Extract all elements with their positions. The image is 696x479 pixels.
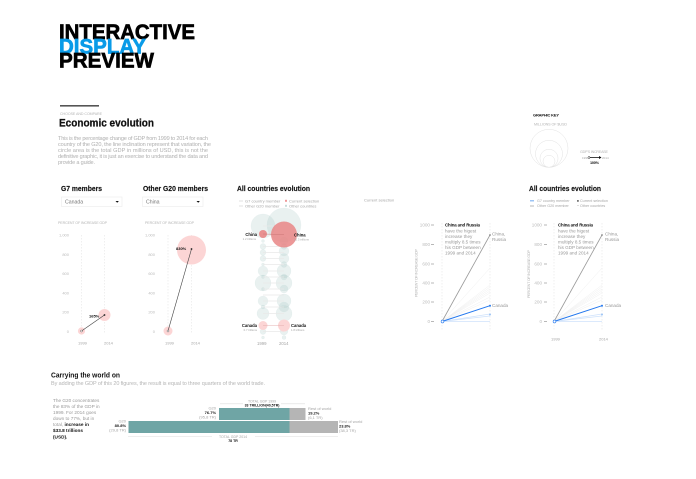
panel: Other G20 members: 2014: [191, 340, 201, 346]
annotation: China,: [605, 232, 618, 236]
panel: G7 members: 200: [62, 310, 70, 314]
panel: line chart 2: 1999: [551, 336, 561, 342]
annotation: increase they: [558, 234, 586, 239]
panel: line chart 2: [527, 184, 622, 342]
panel: all countries bubbles: All countries evolution: [237, 184, 310, 193]
stacked bar: 2014: (38,3 TR): [339, 428, 356, 433]
intro paragraph: [58, 136, 211, 166]
selection: Canada: Canada: [291, 323, 307, 328]
annotation: [444, 221, 509, 308]
graphic key: [530, 112, 609, 167]
stacked bar: 1999: Rest of world: [308, 406, 331, 411]
legend: Other countries: [580, 204, 605, 208]
side note: $33.8 trillions: [53, 428, 83, 433]
panel: line chart 2: 1000: [532, 223, 542, 228]
legend: Other countries: [289, 203, 316, 208]
annotation: 1999 and 2014: [445, 250, 476, 256]
annotation: his GDP between: [445, 245, 481, 250]
stacked bar: 2014: 80.8%: [115, 423, 126, 428]
side note: (USD).: [53, 434, 67, 440]
intro block: [58, 105, 211, 166]
stacked bar: 2014: [109, 418, 362, 443]
panel: all countries bubbles: Current selection: [364, 197, 394, 202]
panel: G7 members: 1,000: [59, 232, 70, 238]
panel: line chart 2: 800: [534, 242, 542, 247]
slope lines: [553, 234, 603, 323]
panel: line chart 1: PERCENT OF INCREASE GDP: [414, 249, 418, 297]
stacked bar: 2014: Rest of world: [339, 419, 362, 424]
selection: Canada: 1.8 trillions: [291, 328, 305, 332]
stacked bar: 2014: G20: [118, 418, 127, 424]
chart: China slope: [164, 236, 206, 336]
panel: G7 members: 800: [62, 252, 70, 257]
annotation: 1999 and 2014: [558, 250, 589, 256]
panel: all countries bubbles: [237, 184, 394, 346]
selection: China: China: [294, 232, 306, 238]
selector: Canada: [62, 197, 122, 206]
annotation: Russia: [605, 237, 619, 242]
annotation: have the higest: [558, 228, 590, 234]
side note: [53, 398, 100, 440]
panel: all countries bubbles: 2014: [279, 341, 289, 346]
selection: China: [243, 222, 310, 248]
selection: Canada: Canada: [242, 323, 258, 328]
stacked bar: 1999: 76.7%: [205, 410, 216, 415]
panel: Other G20 members: 0: [153, 329, 156, 334]
panel: line chart 2: 200: [534, 300, 542, 305]
selection: China: 1.2 trillions: [243, 237, 257, 241]
stacked bar: 1999: TOTAL GDP 1999: [248, 400, 276, 404]
stacked bar: 1999: (95,8 TR): [199, 414, 217, 420]
legend: Other G20 member: [537, 204, 570, 208]
annotation: multiply 8.5 times: [445, 240, 481, 244]
annotation: China,: [492, 232, 505, 236]
panel: G7 members: 0: [67, 329, 70, 334]
selector: China: China: [146, 200, 160, 206]
slope lines: [441, 234, 491, 323]
panel: Other G20 members: 800: [148, 252, 156, 257]
panel: G7 members: 600: [62, 271, 70, 276]
chart: Canada slope: 165%: [89, 314, 100, 318]
stacked bar: 2014: TOTAL GDP 2014: [219, 435, 247, 439]
side note: 1999. For 2014 goes: [53, 410, 97, 415]
panel: line chart 2: 400: [534, 281, 542, 286]
intro paragraph: This is the percentage change of GDP from 1999 to 2014 for each: [58, 136, 208, 142]
panel: Other G20 members: 200: [148, 310, 156, 314]
bubbles 1999: [251, 214, 275, 339]
graphic key: 1999: [582, 156, 589, 160]
panel: all countries bubbles: 1999: [257, 341, 267, 346]
panel: line chart 2: PERCENT OF INCREASE GDP: [527, 250, 531, 298]
panel: G7 members: 2014: [104, 340, 114, 346]
intro block: CHOOSE AND COMPARE: [60, 112, 103, 116]
panel: G7 members: G7 members: [61, 184, 102, 193]
panel: line chart 2: All countries evolution: [529, 184, 601, 193]
panel: line chart 2: 600: [534, 262, 542, 267]
selection: China: China: [245, 232, 258, 237]
panel: line chart 2: 2014: [599, 336, 609, 342]
annotation: China and Russia: [558, 222, 594, 228]
annotation: his GDP between: [558, 245, 594, 250]
legend: [530, 199, 608, 208]
graphic key: 2014: [602, 156, 609, 160]
panel: line chart 1: 200: [422, 300, 430, 305]
graphic key: 100%: [590, 161, 600, 165]
intro paragraph: definitive graphic, it is just an exercise to understand the data and: [58, 154, 208, 160]
side note: the 83% of the GDP in: [53, 404, 100, 409]
legend: Other G20 member: [245, 203, 280, 208]
stacked bar: 2014: 23.8%: [339, 424, 351, 428]
panel: Other G20 members: [142, 184, 208, 346]
legend: Current selection: [289, 198, 319, 203]
legend: G7 country member: [245, 198, 281, 203]
panel: Other G20 members: 1,000: [145, 232, 156, 238]
title: PREVIEW: [59, 48, 155, 72]
stacked bar: 1999: [199, 400, 331, 420]
panel: line chart 1: 400: [422, 281, 430, 286]
panel: line chart 2: 0: [539, 319, 542, 324]
annotation: Canada: [605, 303, 622, 308]
section: carrying the world on: By adding the GDP of this 20 figures, the result is equal to three quarters of the world trade.: [51, 381, 265, 387]
legend: [239, 198, 319, 208]
intro paragraph: country of the G20, the line inclination represent that variation, the: [58, 142, 211, 148]
panel: Other G20 members: 600: [148, 271, 156, 276]
legend: Current selection: [580, 199, 608, 203]
selection: Canada: 0.7 trillions: [244, 328, 258, 332]
selector: Canada: Canada: [65, 200, 83, 206]
stacked bar: 1999: 19.2%: [308, 410, 320, 416]
panel: line chart 1: 800: [422, 242, 430, 247]
panel: line chart 1: 1000: [420, 223, 430, 228]
panel: Other G20 members: Other G20 members: [143, 184, 208, 193]
chart: China slope: 830%: [176, 246, 187, 251]
stacked bar: 2014: 78 TR: [228, 439, 238, 443]
annotation: [557, 221, 622, 308]
annotation: have the higest: [445, 228, 477, 234]
stacked bar: 1999: G20: [208, 406, 217, 410]
stacked bar: 2014: (29,8 TR): [109, 428, 127, 432]
annotation: increase they: [445, 234, 473, 239]
annotation: Canada: [492, 303, 509, 308]
graphic key: GDP'S INCREASE: [580, 150, 609, 154]
stacked bar: 1999: 33 TRILLION(40,5TR): [245, 404, 279, 408]
annotation: multiply 8.5 times: [558, 240, 594, 244]
title: [59, 20, 195, 72]
section: carrying the world on: [51, 370, 362, 443]
side note: total, increase in: [53, 422, 89, 427]
annotation: China and Russia: [445, 222, 481, 228]
title: INTERACTIVE: [59, 20, 195, 44]
selection: Canada: [242, 320, 307, 332]
panel: line chart 1: [414, 221, 509, 330]
intro paragraph: circle area is the total GDP in millions of USD, this is not the: [58, 148, 208, 154]
panel: G7 members: [58, 184, 122, 346]
heading: economic evolution: Economic evolution: [59, 118, 154, 130]
panel: Other G20 members: 400: [148, 290, 156, 296]
stacked bar: 1999: (6,1 TR): [308, 415, 323, 420]
panel: G7 members: 1999: [78, 340, 88, 346]
panel: Other G20 members: PERCENT OF INCREASE GDP: [145, 221, 195, 225]
section: carrying the world on: Carrying the world on: [51, 370, 120, 380]
side note: down to 77%, but in: [53, 416, 95, 421]
side note: The G20 concentrates: [53, 398, 100, 403]
annotation: Russia: [492, 237, 506, 242]
panel: line chart 1: 600: [422, 262, 430, 267]
panel: G7 members: PERCENT OF INCREASE GDP: [58, 221, 108, 225]
legend: G7 country member: [537, 199, 570, 203]
graphic key: GRAPHIC KEY: [533, 112, 559, 118]
graphic key: MILLIONS OF $USD: [534, 122, 567, 126]
intro paragraph: provide a guide.: [58, 160, 95, 166]
panel: G7 members: 400: [62, 290, 70, 296]
panel: line chart 1: 0: [427, 319, 430, 324]
selector: China: [142, 197, 203, 206]
title: DISPLAY: [59, 34, 146, 58]
selection: China: 10.3 trillions: [294, 238, 310, 242]
panel: Other G20 members: 1999: [165, 340, 175, 346]
chart: Canada slope: [78, 309, 110, 335]
bubbles 2014: [267, 208, 301, 340]
